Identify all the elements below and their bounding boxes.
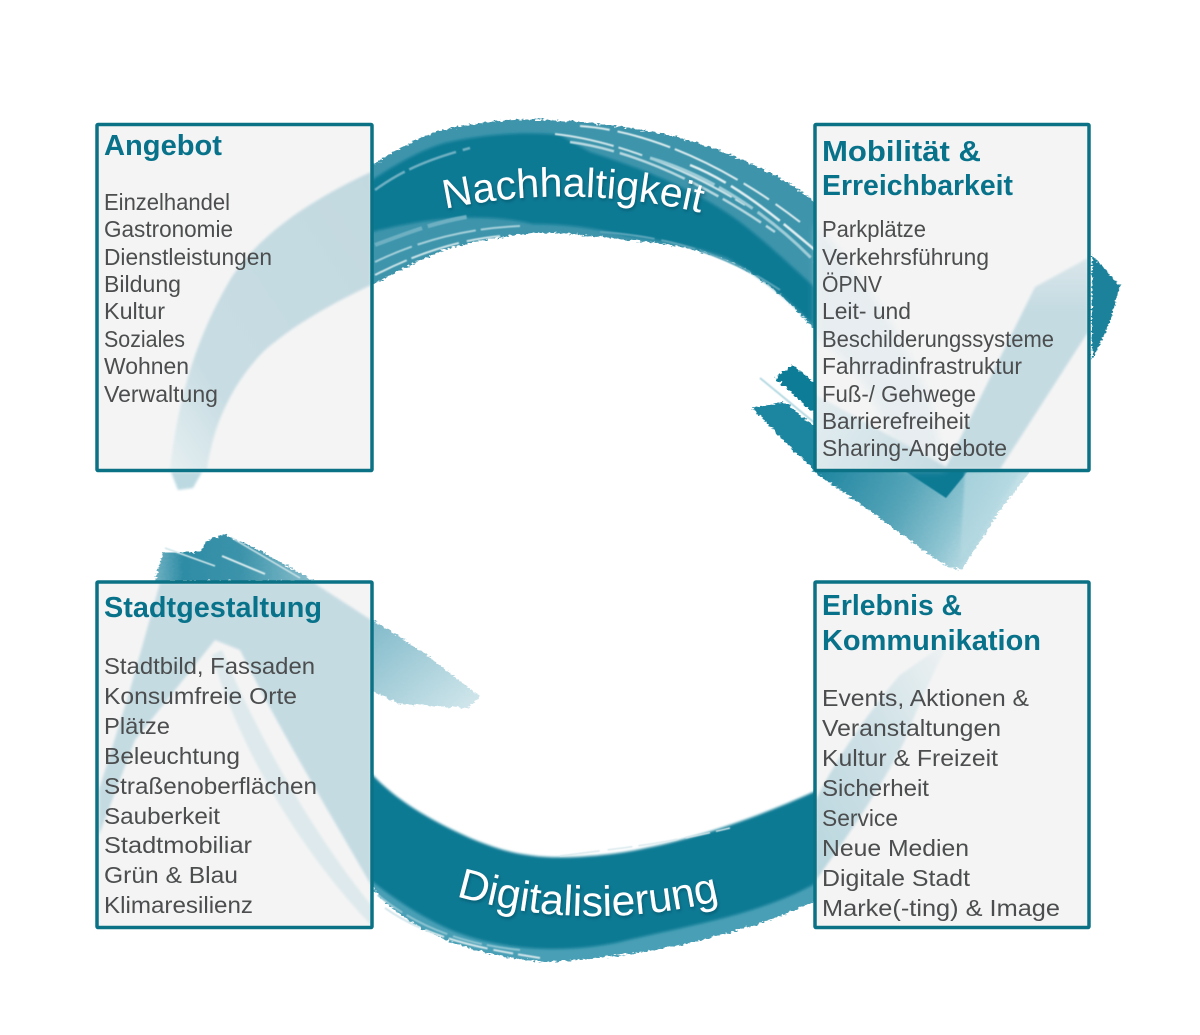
list: Mobilität items: Fuß-/ Gehwege: [822, 381, 976, 407]
list: Angebot items: Bildung: [104, 271, 181, 297]
pale brush inside Angebot panel: [170, 172, 371, 469]
list: Mobilität items: Barrierefreiheit: [822, 408, 971, 434]
list: Erlebnis items: Marke(-ting) & Image: [822, 895, 1060, 921]
list: Erlebnis items: Events, Aktionen &: [822, 685, 1029, 711]
panel: Angebot: [97, 124, 372, 490]
panel border: [815, 124, 1089, 470]
list: Angebot items: Kultur: [104, 298, 165, 324]
list: Erlebnis items: Digitale Stadt: [822, 865, 971, 891]
faint arc continuing through Mobilität panel: [816, 225, 945, 469]
panel: Erlebnis & Kommunikation: [815, 582, 1089, 928]
list: Stadtgestaltung items: Sauberkeit: [104, 803, 221, 829]
heading: Mobilität & Erreichbarkeit: [822, 136, 1013, 202]
list: Stadtgestaltung items: Stadtmobiliar: [104, 832, 252, 858]
heading: Erlebnis & Kommunikation: [822, 590, 1041, 657]
heading: Erlebnis & Kommunikation: Erlebnis &: [822, 590, 962, 622]
list: Angebot items: Einzelhandel: [104, 189, 230, 215]
curved label: Digitalisierung: Digitalisierung: [459, 868, 720, 920]
heading: Stadtgestaltung: Stadtgestaltung: [104, 592, 322, 624]
list: Erlebnis items: Service: [822, 805, 898, 831]
list: Erlebnis items: [822, 685, 1060, 921]
list: Angebot items: Verwaltung: [104, 381, 218, 407]
panel border: [97, 124, 372, 470]
list: Angebot items: Dienstleistungen: [104, 244, 272, 270]
panel border: [815, 582, 1089, 928]
list: Erlebnis items: Sicherheit: [822, 775, 930, 801]
list: Erlebnis items: Kultur & Freizeit: [822, 745, 999, 771]
list: Stadtgestaltung items: Grün & Blau: [104, 862, 238, 888]
pale brush inside Mobilität panel: [945, 258, 1088, 469]
list: Erlebnis items: Veranstaltungen: [822, 715, 1001, 741]
pale brush tail below Angebot panel: [171, 472, 202, 490]
pale brush inside Stadtgestaltung panel: [99, 583, 371, 885]
list: Erlebnis items: Neue Medien: [822, 835, 969, 861]
panel: Stadtgestaltung: [97, 582, 372, 928]
list: Stadtgestaltung items: Klimaresilienz: [104, 892, 253, 918]
heading: Erlebnis & Kommunikation: Kommunikation: [822, 625, 1041, 657]
list: Mobilität items: Verkehrsführung: [822, 244, 989, 270]
pale brush inside Erlebnis panel: [816, 640, 950, 880]
panel border: [97, 582, 372, 928]
list: Mobilität items: Leit- und: [822, 298, 911, 324]
list: Angebot items: Soziales: [104, 326, 185, 352]
panel: Mobilität & Erreichbarkeit: [815, 124, 1089, 470]
list: Mobilität items: ÖPNV: [822, 271, 883, 297]
brush arrow head: top right: [752, 255, 1120, 570]
list: Stadtgestaltung items: Stadtbild, Fassaden: [104, 653, 315, 679]
curved label: Nachhaltigkeit: Nachhaltigkeit: [443, 167, 706, 215]
list: Mobilität items: Parkplätze: [822, 216, 926, 242]
list: Angebot items: Wohnen: [104, 353, 189, 379]
list: Mobilität items: Fahrradinfrastruktur: [822, 353, 1022, 379]
brush arc: top stroke behind Nachhaltigkeit: [372, 119, 818, 334]
list: Stadtgestaltung items: Konsumfreie Orte: [104, 683, 297, 709]
brush arc: bottom stroke behind Digitalisierung: [370, 772, 818, 962]
heading: Mobilität & Erreichbarkeit: Erreichbarkeit: [822, 170, 1013, 202]
list: Stadtgestaltung items: [104, 653, 317, 918]
heading: Angebot: Angebot: [104, 130, 222, 162]
list: Stadtgestaltung items: Plätze: [104, 713, 170, 739]
list: Mobilität items: Sharing-Angebote: [822, 435, 1007, 461]
list: Stadtgestaltung items: Beleuchtung: [104, 743, 240, 769]
faint second brush band in Stadtgestaltung panel: [212, 650, 371, 925]
list: Mobilität items: Beschilderungssysteme: [822, 326, 1054, 352]
list: Angebot items: Gastronomie: [104, 216, 233, 242]
heading: Mobilität & Erreichbarkeit: Mobilität &: [822, 136, 981, 168]
pale brush lower left of Mobilität panel: [816, 395, 950, 469]
list: Angebot items: [104, 189, 272, 407]
brush arrow head: bottom left: [155, 534, 480, 708]
list: Mobilität items: [822, 216, 1054, 461]
list: Stadtgestaltung items: Straßenoberflächen: [104, 773, 317, 799]
